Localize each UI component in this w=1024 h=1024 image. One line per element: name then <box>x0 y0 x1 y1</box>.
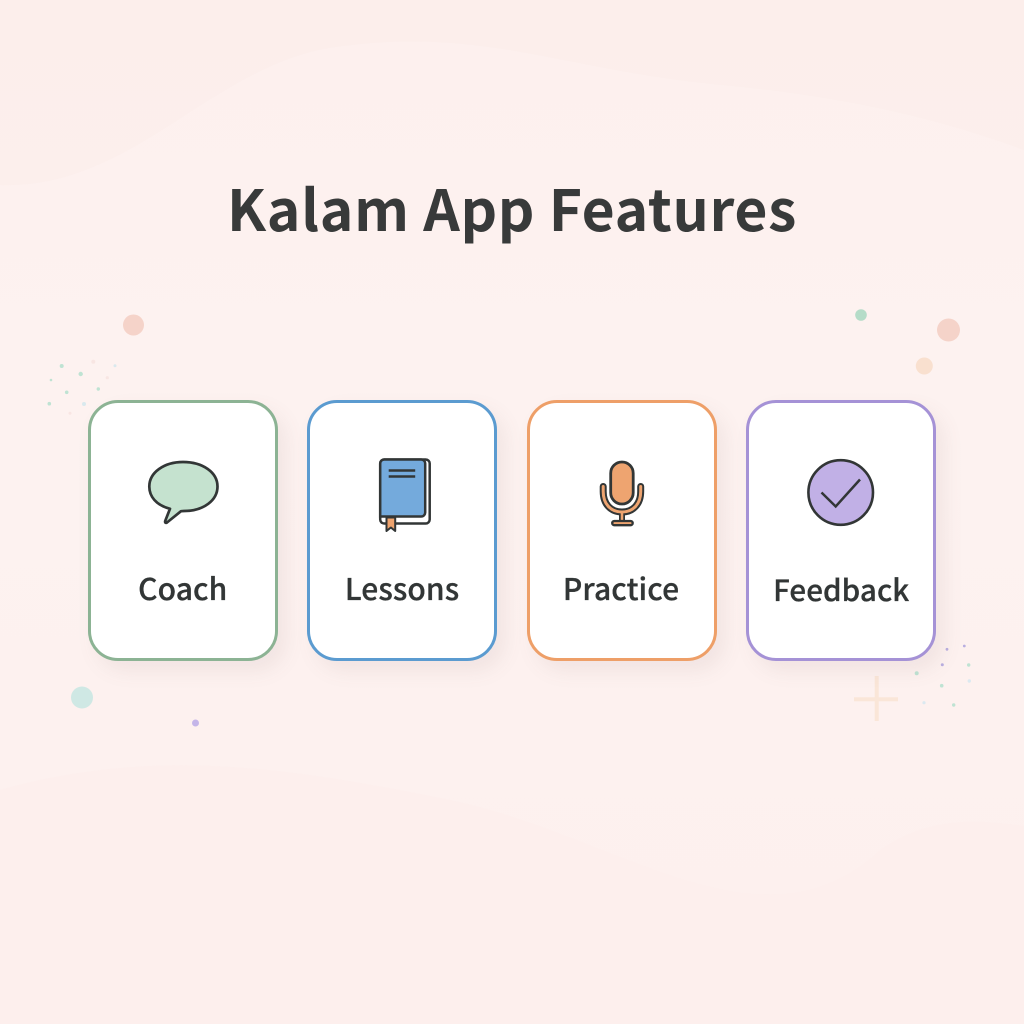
decorative circle: small purple <box>192 720 199 726</box>
label: Coach: Coach <box>138 564 227 608</box>
decorative circle: green upper right <box>855 309 867 321</box>
decorative plus: peach <box>854 676 898 721</box>
icon: speech bubble <box>148 460 219 524</box>
panel: Practice <box>527 400 717 660</box>
panel: Feedback <box>746 400 936 660</box>
panel: Coach <box>88 400 278 660</box>
icon: microphone <box>600 460 644 526</box>
decorative circle: coral left <box>123 314 144 336</box>
icon: check circle <box>807 458 874 526</box>
decorative dots: upper left <box>48 360 116 414</box>
title: Kalam App Features <box>227 166 797 248</box>
label: Lessons: Lessons <box>345 564 459 608</box>
decorative circle: coral upper right <box>937 318 960 342</box>
label: Feedback: Feedback <box>773 568 909 610</box>
label: Practice: Practice <box>563 564 679 608</box>
panel: Lessons <box>307 400 497 660</box>
decorative circle: peach upper right <box>916 358 933 374</box>
icon: book <box>378 458 431 532</box>
decorative circle: teal lower left <box>71 686 93 708</box>
decorative dots: lower right <box>914 644 971 707</box>
